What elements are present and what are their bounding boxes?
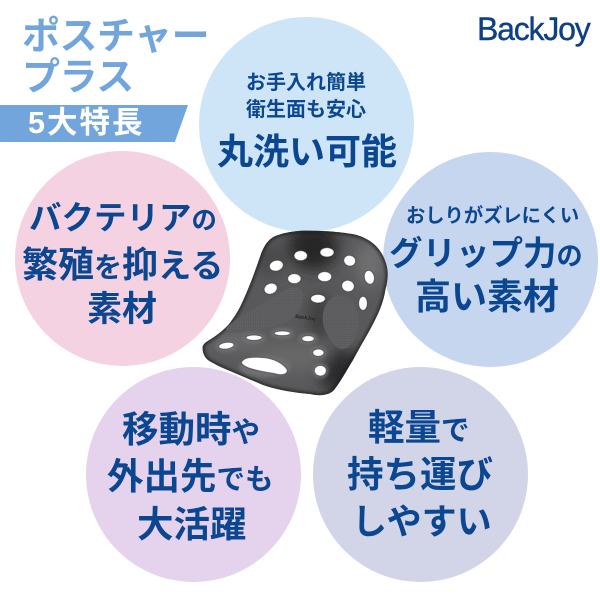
seat rim <box>203 231 388 395</box>
holes <box>218 248 376 376</box>
text: antibacterial: 繁殖を抑える <box>22 244 223 285</box>
text: grip: 高い素材 <box>415 276 559 317</box>
banner: 5 features: 5大特長 <box>28 106 144 140</box>
text: washable: お手入れ簡単 <box>246 72 366 94</box>
text: grip: おしりがズレにくい <box>406 206 579 227</box>
circle: washable <box>199 17 414 232</box>
text: travel: 大活躍 <box>137 504 246 545</box>
text: travel: 移動時や <box>122 409 260 450</box>
text: lightweight: 持ち運び <box>347 454 493 495</box>
product: seat cushion <box>202 230 388 396</box>
text: antibacterial: バクテリアの <box>29 200 217 236</box>
text: travel: 外出先でも <box>107 456 273 497</box>
text: lightweight: しやすい <box>352 503 492 542</box>
circle: antibacterial <box>15 151 230 366</box>
title <box>22 16 209 99</box>
text: grip: グリップ力の <box>389 236 583 273</box>
hole shading <box>216 328 328 378</box>
text: lightweight: 軽量で <box>368 407 469 448</box>
title: ポスチャー <box>22 16 209 58</box>
logo: BackJoy: BackJoy <box>477 11 590 47</box>
seat body <box>202 230 388 396</box>
text: washable: 丸洗い可能 <box>217 131 397 172</box>
text: washable: 衛生面も安心 <box>246 99 366 121</box>
circle: grip <box>383 152 598 367</box>
circle: lightweight <box>313 367 528 582</box>
circle: travel <box>86 367 301 582</box>
banner: 5 features <box>0 105 188 142</box>
seat logo mark: BackJoy <box>295 314 316 323</box>
pressure pads <box>226 287 303 334</box>
text: antibacterial: 素材 <box>87 290 157 329</box>
title: プラス <box>22 57 134 99</box>
